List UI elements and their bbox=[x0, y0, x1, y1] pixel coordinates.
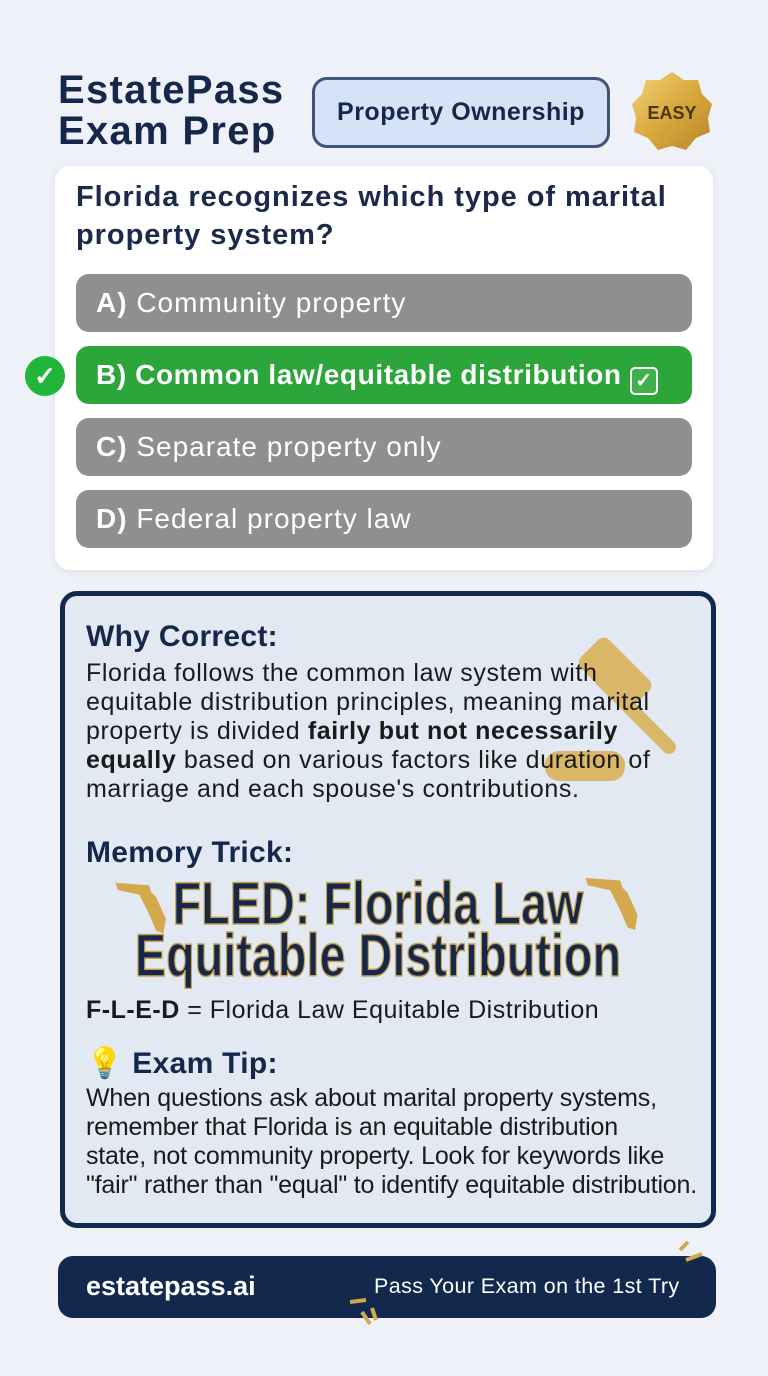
option C bbox=[76, 418, 692, 476]
mnemonic text: Equitable Distribution bbox=[135, 922, 621, 989]
option B correct: ✓ bbox=[635, 370, 653, 392]
mnemonic text bbox=[135, 870, 621, 989]
explanation panel bbox=[60, 591, 716, 1228]
why correct body: Florida follows the common law system with bbox=[86, 659, 597, 687]
question card bbox=[55, 166, 713, 570]
mnemonic explanation: F-L-E-D = Florida Law Equitable Distribution bbox=[86, 996, 599, 1024]
why correct body bbox=[86, 659, 650, 803]
option A: A) Community property bbox=[96, 287, 406, 318]
category pill bbox=[312, 77, 610, 148]
icon: florida left bbox=[115, 882, 166, 934]
exam tip body: state, not community property. Look for keywords like bbox=[86, 1142, 664, 1170]
exam tip body: "fair" rather than "equal" to identify equitable distribution. bbox=[86, 1171, 697, 1199]
why correct body: equally based on various factors like duration of bbox=[86, 746, 650, 774]
mnemonic text: FLED: Florida Law bbox=[173, 870, 583, 937]
option C: C) Separate property only bbox=[96, 431, 442, 462]
option A bbox=[76, 274, 692, 332]
badge: easy: EASY bbox=[647, 103, 697, 123]
footer bbox=[58, 1256, 716, 1318]
title: EstatePass bbox=[58, 68, 284, 112]
exam tip body bbox=[86, 1084, 697, 1199]
option D: D) Federal property law bbox=[96, 503, 412, 534]
exam tip body: When questions ask about marital property systems, bbox=[86, 1084, 657, 1112]
why correct body: marriage and each spouse's contributions. bbox=[86, 775, 580, 803]
icon: florida right bbox=[586, 878, 638, 930]
memory trick heading: Memory Trick: bbox=[86, 836, 293, 869]
exam tip heading: 💡 Exam Tip: bbox=[86, 1047, 278, 1080]
icon: gavel bbox=[545, 638, 676, 781]
option B correct: B) Common law/equitable distribution bbox=[96, 359, 622, 390]
title bbox=[58, 68, 284, 153]
why correct heading: Why Correct: bbox=[86, 620, 278, 653]
option B correct bbox=[76, 346, 692, 404]
question text: Florida recognizes which type of marital bbox=[76, 181, 667, 213]
title: Exam Prep bbox=[58, 109, 276, 153]
icon: check circle bbox=[25, 356, 65, 396]
category pill: Property Ownership bbox=[337, 98, 585, 126]
decorative sparkles bbox=[350, 1240, 703, 1326]
footer brand: estatepass.ai bbox=[86, 1271, 256, 1301]
icon: check circle: ✓ bbox=[34, 361, 56, 391]
why correct body: equitable distribution principles, meaning marital bbox=[86, 688, 650, 716]
why correct body: property is divided fairly but not necessarily bbox=[86, 717, 618, 745]
question text bbox=[76, 181, 667, 251]
footer tagline: Pass Your Exam on the 1st Try bbox=[374, 1274, 680, 1298]
option D bbox=[76, 490, 692, 548]
question text: property system? bbox=[76, 219, 335, 251]
exam tip body: remember that Florida is an equitable distribution bbox=[86, 1113, 618, 1141]
badge: easy bbox=[632, 72, 712, 150]
